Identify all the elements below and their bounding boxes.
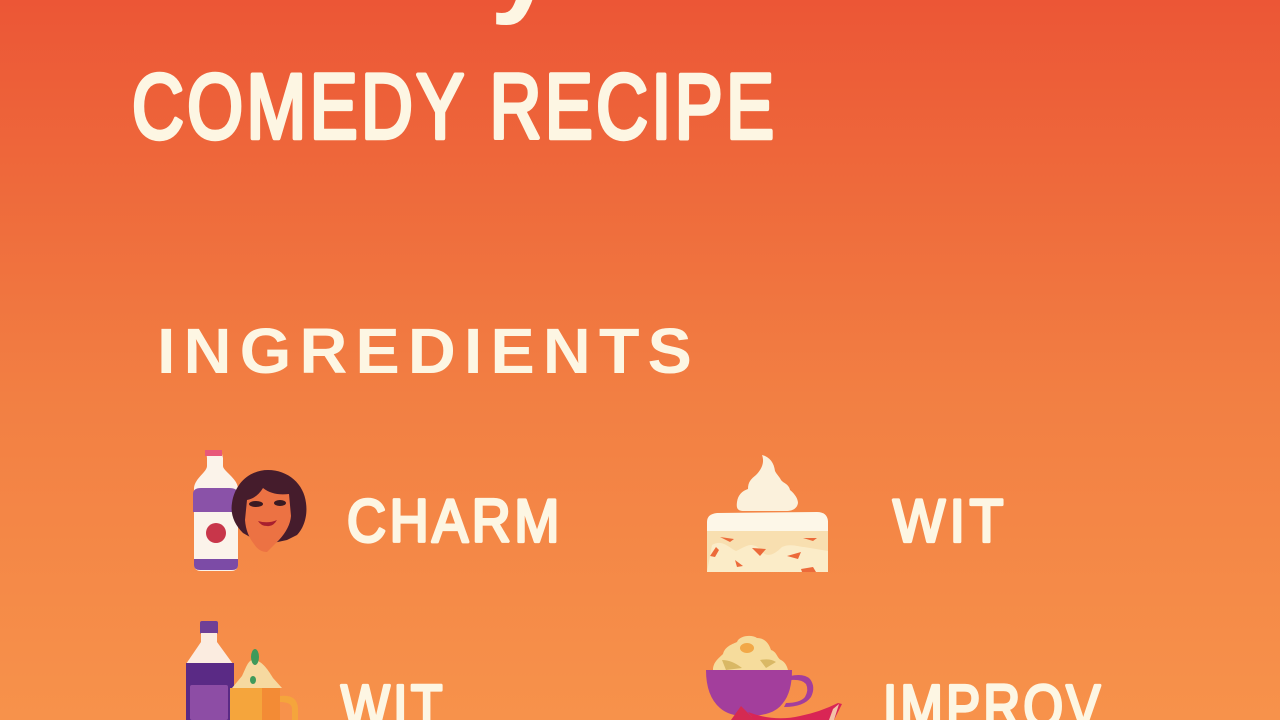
ingredient: improv xyxy=(706,636,1104,720)
ingredient: charm xyxy=(193,450,563,571)
icon: bottle and face xyxy=(193,450,306,571)
heading: ingredients: INGREDIENTS xyxy=(157,315,700,387)
ingredient: wit (cake) xyxy=(707,455,1008,572)
label: wit: WIT xyxy=(893,488,1008,555)
icon: cup with topping xyxy=(706,636,842,720)
icon: cream cake xyxy=(707,455,828,572)
title: comedy recipe: COMEDY RECIPE xyxy=(132,55,777,158)
label: charm: CHARM xyxy=(347,488,563,555)
icon: bottle and mug xyxy=(186,621,298,720)
ingredient: wit (bottle and mug) xyxy=(186,621,446,720)
